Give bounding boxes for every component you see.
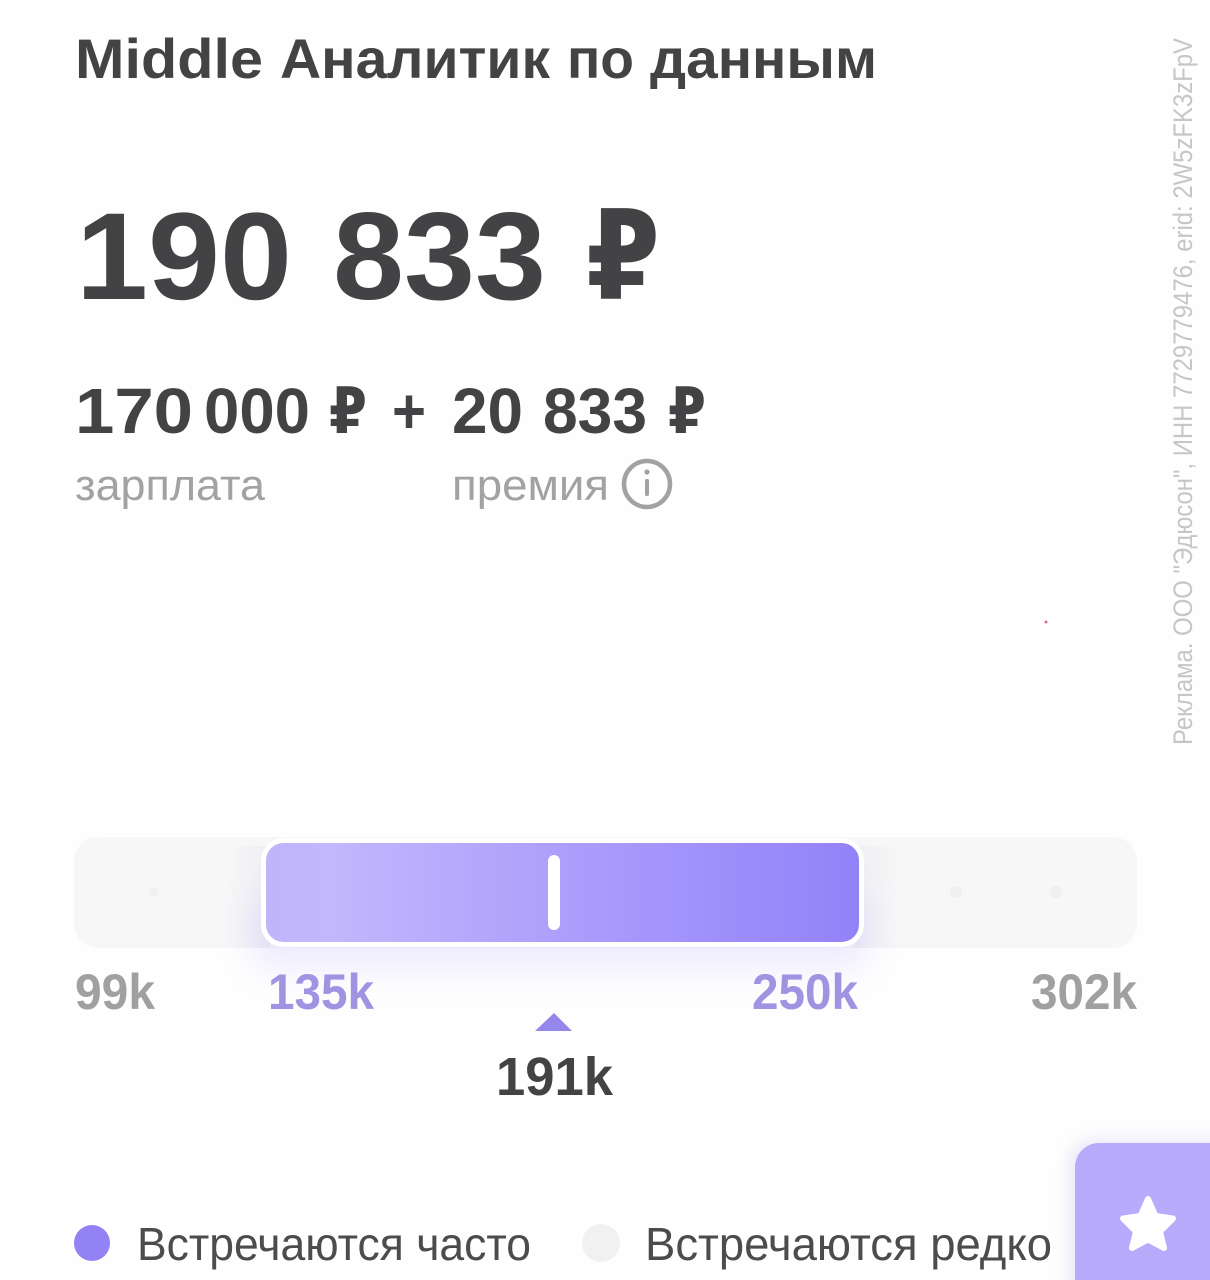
icon: star: [1123, 1199, 1173, 1248]
range track: [74, 837, 1137, 948]
title: по: [567, 27, 634, 90]
legend swatch: frequent: [74, 1225, 110, 1261]
median marker: [548, 855, 560, 930]
title: Аналитик: [280, 27, 551, 90]
salary breakdown: [75, 375, 706, 510]
red speck: [1044, 620, 1048, 624]
salary label: зарплата: [75, 461, 266, 510]
legend label: frequent: Встречаются часто: [137, 1218, 531, 1270]
legend label: rare: Встречаются редко: [645, 1218, 1052, 1270]
total amount: [76, 188, 660, 326]
track dots: [149, 886, 1062, 898]
salary amount: 170: [75, 375, 193, 447]
range glow: [250, 890, 870, 970]
high label: 302k: [1031, 964, 1137, 1020]
total amount: ₽: [586, 188, 660, 326]
range side shadows: [225, 846, 900, 948]
bonus amount: 833: [543, 375, 647, 447]
legend: [74, 1218, 1052, 1270]
bonus amount: 20: [452, 375, 523, 447]
total amount: 190: [76, 188, 292, 326]
range end label: 250k: [752, 964, 858, 1020]
plus sign: +: [392, 375, 426, 447]
salary range chart: [74, 837, 1137, 1107]
salary amount: [75, 375, 367, 447]
salary amount: 000: [204, 375, 310, 447]
title: Middle: [75, 27, 263, 90]
median pointer: [535, 1013, 572, 1031]
bonus label: премия: [452, 461, 609, 510]
bonus amount: [452, 375, 706, 447]
icon: info: [624, 461, 670, 507]
low label: 99k: [75, 964, 155, 1020]
median label: 191k: [496, 1047, 614, 1107]
title: данным: [650, 27, 877, 90]
favourite button: [1068, 1138, 1210, 1280]
title: [75, 27, 877, 90]
salary amount: ₽: [329, 375, 367, 447]
total amount: 833: [333, 188, 546, 326]
bonus amount: ₽: [668, 375, 706, 447]
frequent range bar: [264, 840, 862, 944]
range start label: 135k: [268, 964, 374, 1020]
legend swatch: rare: [582, 1224, 620, 1262]
